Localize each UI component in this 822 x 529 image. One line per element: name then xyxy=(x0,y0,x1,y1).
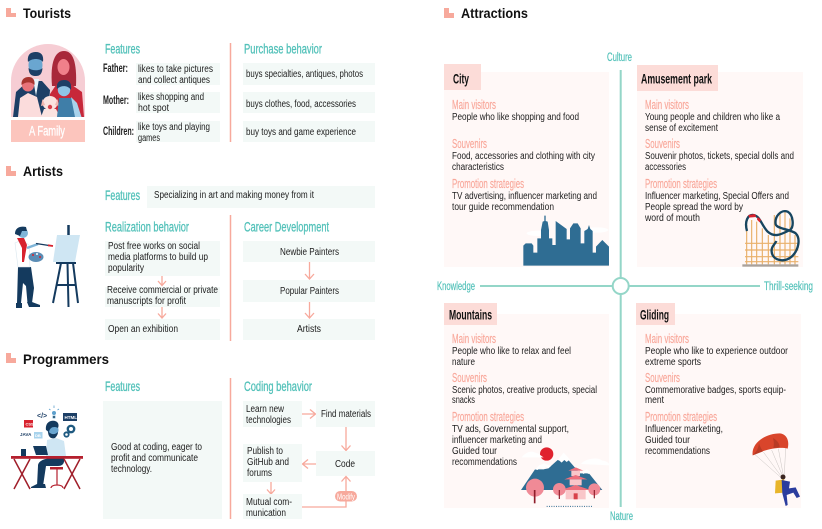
text: amusement park details: word of mouth xyxy=(644,213,700,224)
text: gliding details: extreme sports xyxy=(645,357,701,368)
features text: Good at coding, eager to xyxy=(111,442,202,453)
text: mountains details: Souvenirs xyxy=(452,371,487,385)
illustration: programmer at desk: </> xyxy=(37,413,47,420)
heading: Attractions: Attractions xyxy=(461,5,528,21)
panel: tourists xyxy=(6,5,375,144)
text: mountains details: Guided tour xyxy=(452,446,498,457)
stage: newbie painters: Newbie Painters xyxy=(280,247,339,258)
illustration: programmer at desk xyxy=(11,406,83,489)
row: mother: likes shopping and xyxy=(138,92,204,103)
illustration: programmer at desk: JAVA xyxy=(20,432,32,437)
icon: attractions section marker xyxy=(444,8,454,18)
purchase row 1: buys specialties, antiques, photos xyxy=(246,69,363,80)
text: gliding details: Main visitors xyxy=(645,332,689,346)
stage: artists: Artists xyxy=(297,324,321,335)
row: mother: hot spot xyxy=(138,103,169,114)
text: gliding details: Promotion strategies xyxy=(645,410,717,424)
purchase row 3: buy toys and game experience xyxy=(246,127,356,138)
row: children: Children: xyxy=(103,126,134,138)
text: city details: Promotion strategies xyxy=(452,177,524,191)
text: gliding details: Influencer marketing, xyxy=(645,424,723,435)
text: gliding details: Commemorative badges, sports equip- xyxy=(645,385,786,396)
step: open an exhibition: Open an exhibition xyxy=(108,324,178,335)
badge: modify: Modify xyxy=(337,492,356,502)
stage: artists xyxy=(243,319,375,340)
purchase row 2: buys clothes, food, accessories xyxy=(246,99,356,110)
text: gliding details xyxy=(645,332,789,457)
text: amusement park details: Promotion strategies xyxy=(645,177,717,191)
step: mutual communication xyxy=(243,494,302,519)
row: father xyxy=(103,63,220,86)
label: gliding: Gliding xyxy=(640,308,669,322)
row: father: likes to take pictures xyxy=(138,64,213,75)
step: find materials xyxy=(316,401,375,427)
text: gliding details: recommendations xyxy=(645,446,710,457)
row: children xyxy=(103,121,220,144)
heading: Features: Features xyxy=(105,40,140,56)
icon: artists section marker xyxy=(6,166,16,176)
arrow: popular to artists xyxy=(305,302,314,318)
step: learn new technologies xyxy=(243,401,302,427)
features text xyxy=(147,186,375,208)
arrow: code to publish xyxy=(302,460,316,468)
illustration: mountain and pagoda xyxy=(521,447,610,506)
features text: profit and communicate xyxy=(111,453,198,464)
step: publish to github: GitHub and xyxy=(247,457,289,468)
arrow: mutual communication back to code xyxy=(302,476,350,507)
step: post free works: popularity xyxy=(108,263,144,274)
text: city details: People who like shopping and food xyxy=(452,112,579,123)
text: mountains details: Promotion strategies xyxy=(452,410,524,424)
text: mountains details: recommendations xyxy=(452,457,517,468)
text: mountains details: snacks xyxy=(452,395,475,406)
heading: Realization behavior: Realization behavior xyxy=(105,218,189,234)
quadrant: mountains xyxy=(444,303,610,508)
text: mountains details: People who like to relax and feel xyxy=(452,346,571,357)
text: amusement park details: Young people and children who like a xyxy=(645,112,780,123)
text: gliding details: Guided tour xyxy=(645,435,691,446)
text: amusement park details xyxy=(644,98,794,224)
purchase row 3 xyxy=(243,121,375,142)
stage: popular painters xyxy=(243,280,375,302)
illustration: roller coaster xyxy=(742,211,799,267)
features text: technology. xyxy=(111,464,152,475)
purchase row 2 xyxy=(243,92,375,113)
step: learn new technologies: technologies xyxy=(246,415,291,426)
text: gliding details: People who like to experience outdoor xyxy=(645,346,789,357)
label: city: City xyxy=(453,72,469,86)
step: post free works: media platforms to build up xyxy=(108,252,208,263)
text: amusement park details: Influencer marketing, Special Offers and xyxy=(645,191,789,202)
axes: culture, nature, knowledge, thrill-seeking: Culture xyxy=(607,52,632,64)
arrow: publish to mutual communication xyxy=(267,482,275,494)
features text: Specializing in art and making money from it xyxy=(154,190,314,201)
illustration: parachutist xyxy=(753,433,800,506)
heading: Features: Features xyxy=(105,378,140,394)
quadrant: gliding xyxy=(636,303,801,508)
quadrant: amusement park xyxy=(637,65,803,267)
step: mutual communication: munication xyxy=(246,508,286,519)
label: city xyxy=(444,64,481,90)
axes: culture, nature, knowledge, thrill-seeking: Nature xyxy=(610,511,633,523)
step: learn new technologies: Learn new xyxy=(246,404,285,415)
heading: Artists: Artists xyxy=(23,163,63,179)
text: mountains details: nature xyxy=(452,357,475,368)
text: mountains details: TV ads, Governmental support, xyxy=(452,424,569,435)
text: mountains details: Main visitors xyxy=(452,332,496,346)
illustration: programmer at desk: DB xyxy=(35,433,41,438)
arrow: learn to find xyxy=(302,410,316,418)
row: mother: Mother: xyxy=(103,95,129,107)
heading: Career Development: Career Development xyxy=(244,218,329,234)
arrow: post to receive xyxy=(158,276,166,286)
text: gliding details: Souvenirs xyxy=(645,371,680,385)
quadrant: city xyxy=(444,64,609,267)
illustration: family xyxy=(11,44,85,117)
text: amusement park details: People spread the word by xyxy=(645,202,743,213)
arrow: find to code xyxy=(342,427,350,450)
icon: programmers section marker xyxy=(6,353,16,363)
row: children: games xyxy=(138,133,160,144)
text: gliding details: ment xyxy=(645,395,664,406)
row: father: and collect antiques xyxy=(138,75,210,86)
text: amusement park details: sense of excitement xyxy=(645,123,718,134)
heading: Programmers: Programmers xyxy=(23,351,109,367)
row: father: Father: xyxy=(103,63,128,75)
label: gliding xyxy=(636,303,675,325)
text: city details: tour guide recommendation xyxy=(452,202,554,213)
axes: culture, nature, knowledge, thrill-seeking: Knowledge xyxy=(437,281,475,293)
heading: Features: Features xyxy=(105,187,140,203)
stage: newbie painters xyxy=(243,241,375,262)
illustration: city skyline xyxy=(523,216,609,266)
stage: popular painters: Popular Painters xyxy=(280,286,339,297)
row: mother xyxy=(103,92,220,114)
panel: artists xyxy=(6,163,375,341)
text: mountains details: influencer marketing and xyxy=(452,435,542,446)
text: amusement park details: accessories xyxy=(645,162,686,173)
step: post free works xyxy=(105,241,220,276)
step: receive manuscripts: Receive commercial or private xyxy=(107,285,218,296)
icon: tourists section marker xyxy=(6,8,16,17)
text: amusement park details: Main visitors xyxy=(645,98,689,112)
text: city details: TV advertising, influencer marketing and xyxy=(452,191,597,202)
label: mountains: Mountains xyxy=(449,308,492,322)
step: code: Code xyxy=(335,459,355,470)
illustration: programmer at desk: CSS xyxy=(26,422,34,426)
step: receive manuscripts xyxy=(105,285,220,307)
text: amusement park details: Souvenirs xyxy=(645,137,680,151)
illustration: programmer at desk: HTML xyxy=(64,415,77,420)
label: A Family: A Family xyxy=(29,122,65,138)
panel: programmers xyxy=(6,351,375,519)
label: A Family xyxy=(11,120,85,142)
step: publish to github xyxy=(243,444,302,482)
panel: attractions xyxy=(437,5,813,523)
text: city details: characteristics xyxy=(452,162,504,173)
heading: Purchase behavior: Purchase behavior xyxy=(244,40,322,56)
axes: culture, nature, knowledge, thrill-seeking xyxy=(437,52,813,523)
step: code xyxy=(316,451,375,476)
illustration: painter at easel xyxy=(15,225,80,308)
label: amusement park: Amusement park xyxy=(641,72,712,86)
step: post free works: Post free works on social xyxy=(108,241,200,252)
text: city details: Main visitors xyxy=(452,98,496,112)
label: mountains xyxy=(444,303,497,325)
text: city details: Food, accessories and clothing with city xyxy=(452,151,595,162)
step: publish to github: Publish to xyxy=(247,446,283,457)
features text xyxy=(103,401,222,519)
step: publish to github: forums xyxy=(247,468,272,479)
text: city details xyxy=(452,98,597,213)
step: receive manuscripts: manuscripts for profit xyxy=(107,296,186,307)
label: amusement park xyxy=(637,65,718,91)
text: mountains details xyxy=(452,332,597,468)
step: mutual communication: Mutual com- xyxy=(246,497,292,508)
arrow: receive to exhibition xyxy=(158,307,166,318)
text: mountains details: Scenic photos, creative products, special xyxy=(452,385,597,396)
heading: Coding behavior: Coding behavior xyxy=(244,378,312,394)
heading: Tourists: Tourists xyxy=(23,5,71,21)
step: open an exhibition xyxy=(105,319,220,340)
purchase row 1 xyxy=(243,63,375,85)
row: children: like toys and playing xyxy=(138,122,210,133)
text: city details: Souvenirs xyxy=(452,137,487,151)
step: find materials: Find materials xyxy=(321,409,371,420)
arrow: newbie to popular xyxy=(305,262,314,279)
